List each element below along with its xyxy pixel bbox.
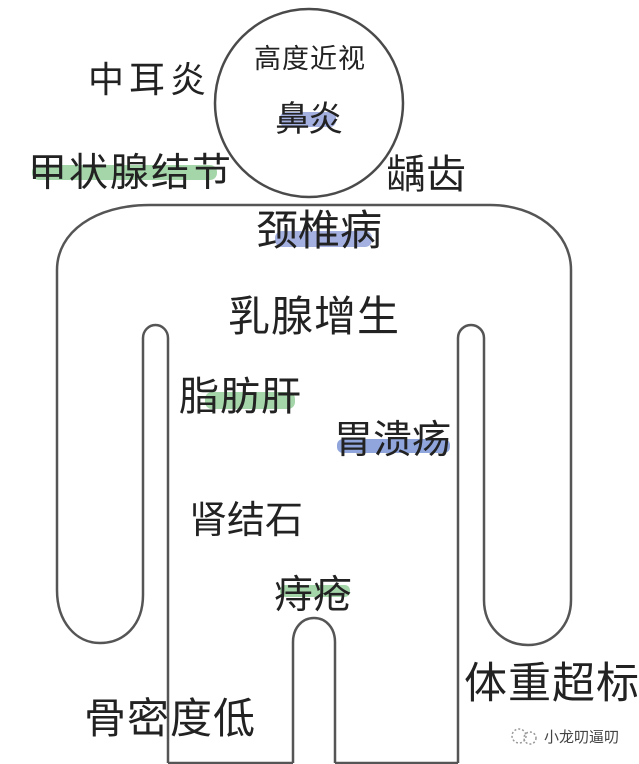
highlight: nose inflammation [280,112,336,127]
label: otitis media: 中耳炎 [88,59,211,100]
label: rhinitis: 鼻炎 [275,100,342,139]
label: low bone density: 骨密度低 [84,695,256,742]
label: thyroid nodules: 甲状腺结节 [28,152,233,195]
icon: watermark logo [512,729,536,744]
label: high myopia: 高度近视 [254,44,366,74]
label: breast hyperplasia: 乳腺增生 [228,293,400,340]
highlight: fatty liver [205,392,295,409]
label: stomach ulcer: 胃溃疡 [334,419,451,462]
label: hemorrhoids: 痔疮 [274,574,352,617]
label: dental caries: 龋齿 [386,153,466,197]
highlight: cervical spondylosis [275,231,372,247]
body outline [57,205,571,763]
highlight: stomach ulcer [337,439,450,453]
label: kidney stones: 肾结石 [189,500,303,542]
highlight: hemorrhoids [280,585,350,597]
watermark name: 小龙叨逼叨 [544,729,619,746]
highlight: thyroid nodules [32,165,217,180]
label: fatty liver: 脂肪肝 [179,375,302,419]
watermark [512,729,619,746]
label: cervical spondylosis: 颈椎病 [256,207,382,254]
icon: head circle [215,9,403,197]
